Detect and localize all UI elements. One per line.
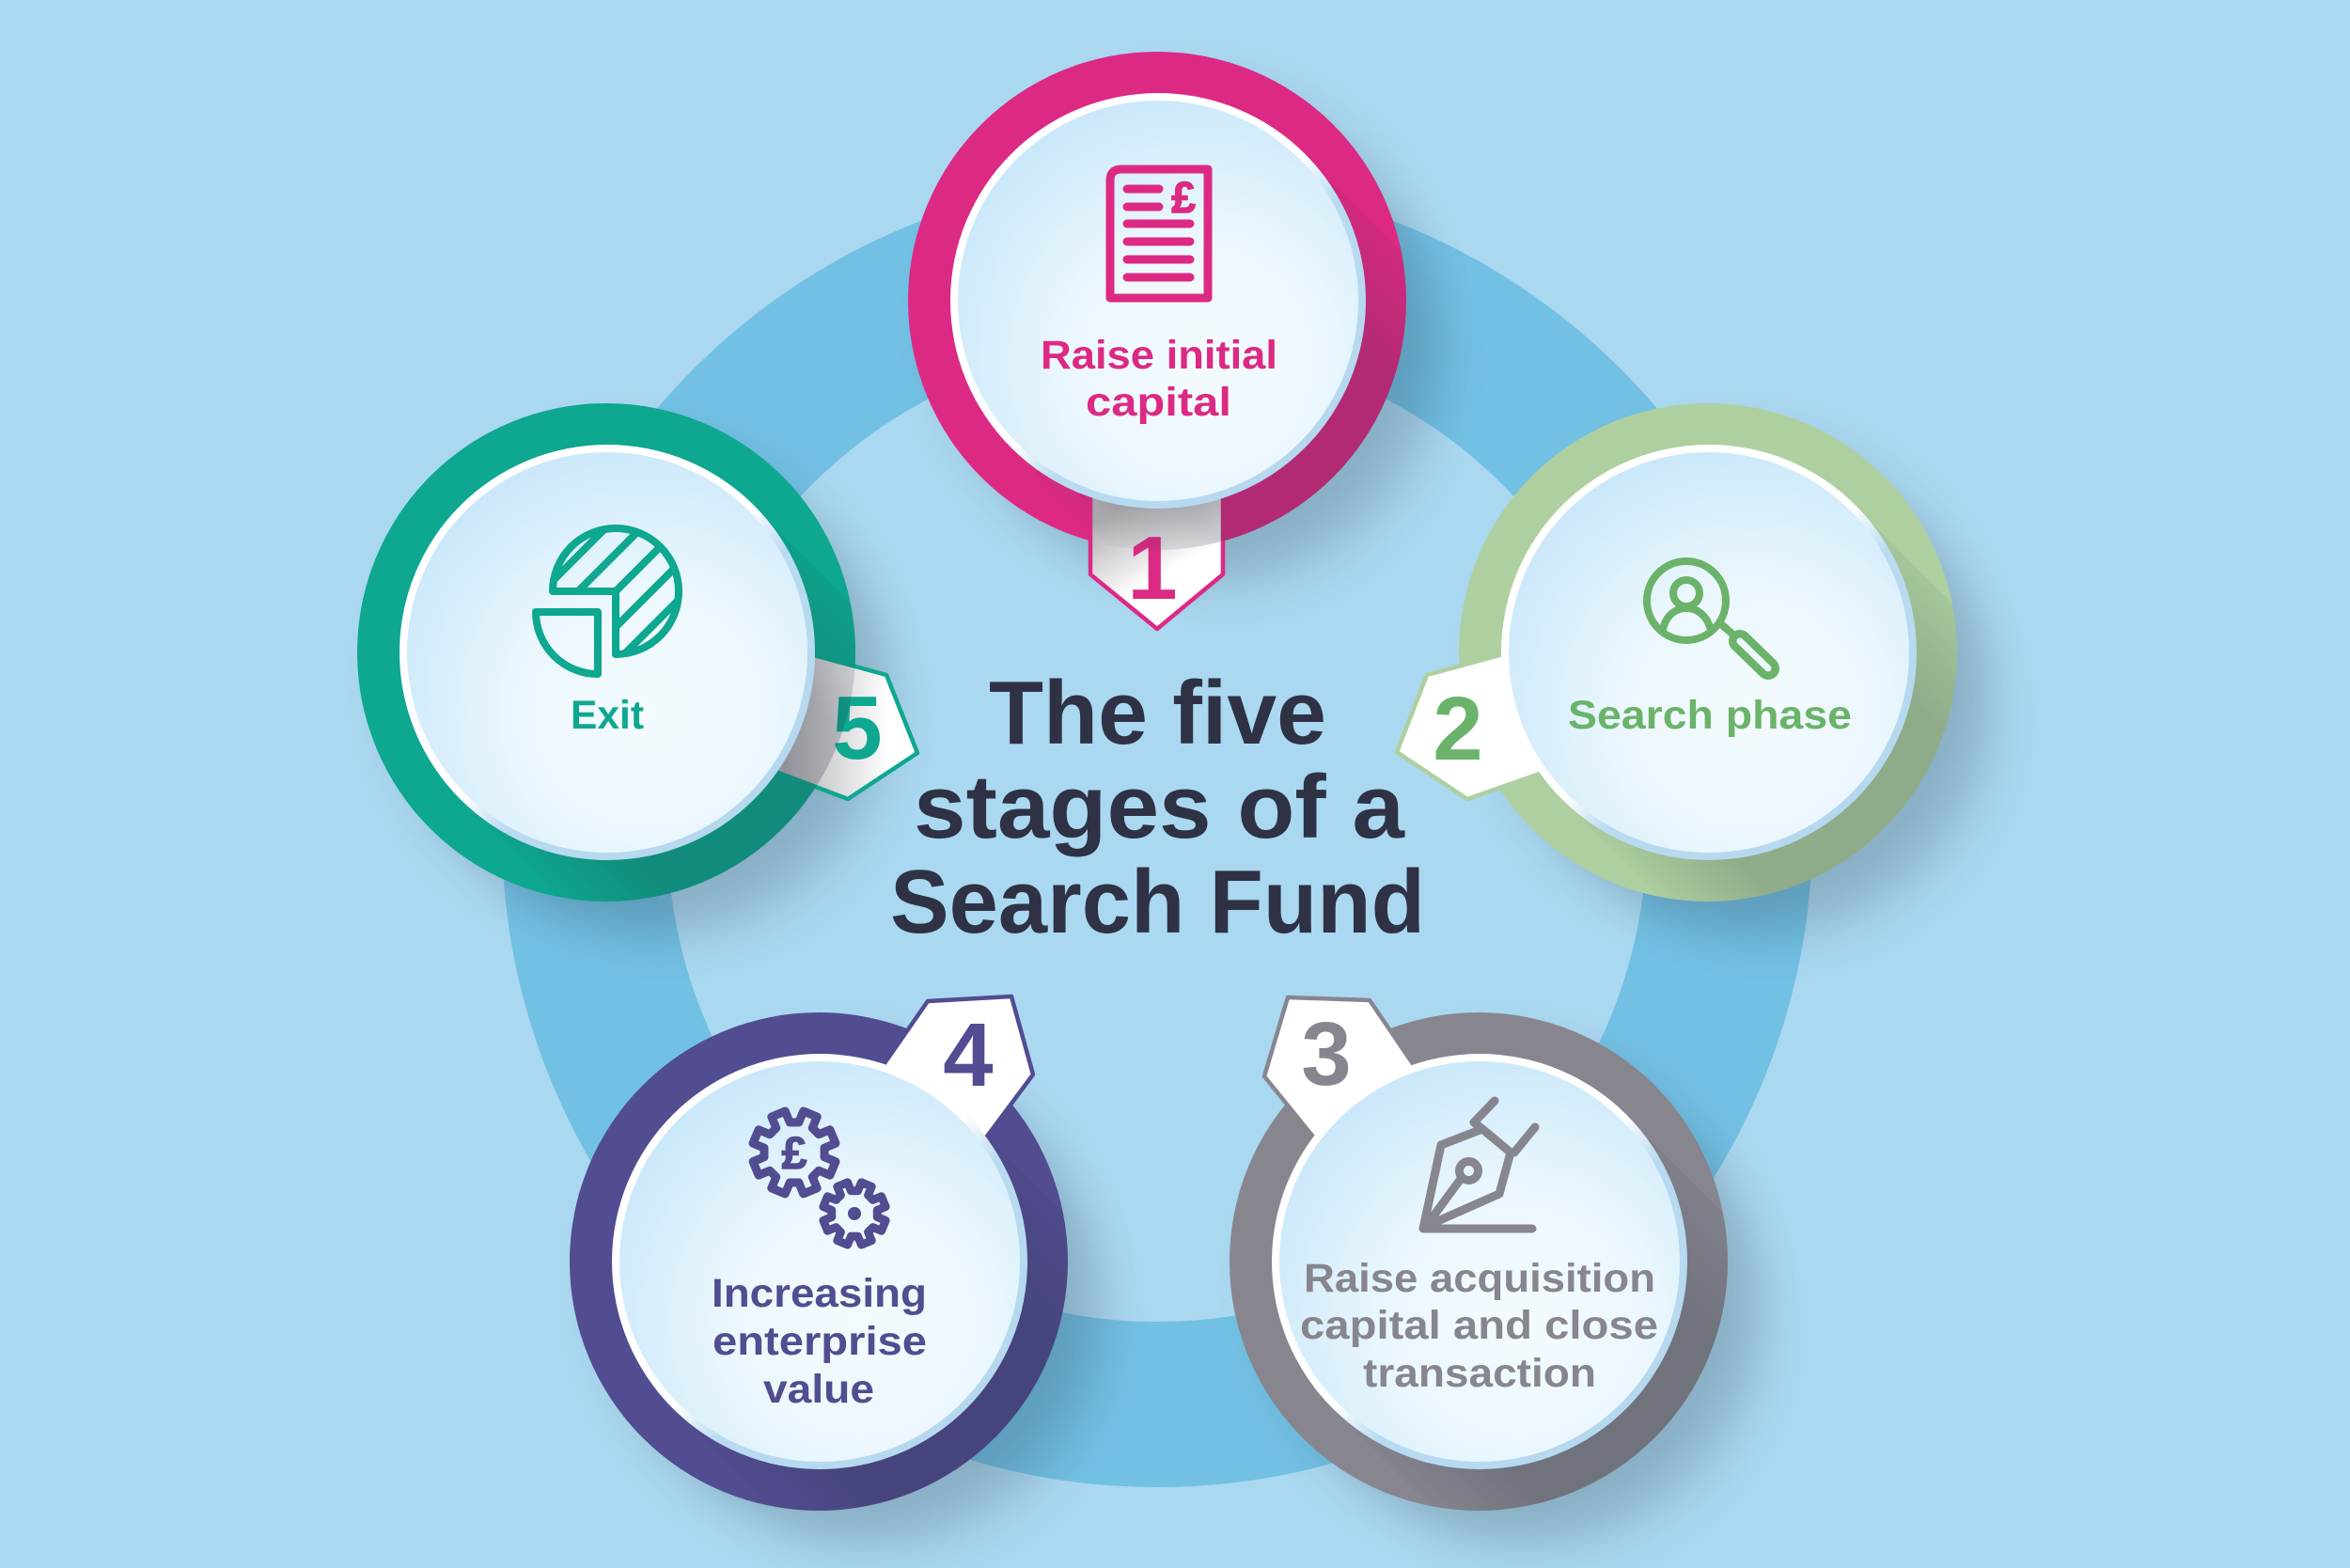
label — [712, 1271, 927, 1412]
stage 2 panel: search phase — [1397, 403, 2043, 987]
badge 5 — [724, 638, 917, 799]
label: Search phase — [1568, 693, 1852, 738]
title: The five — [989, 663, 1326, 763]
label — [1300, 1256, 1658, 1396]
label: Increasing — [712, 1271, 927, 1316]
badge 1 — [1090, 470, 1223, 629]
badge 1: 1 — [1127, 518, 1178, 619]
title — [890, 663, 1425, 952]
badge 5: 5 — [832, 678, 883, 778]
label: Exit — [571, 693, 644, 738]
label: enterprise — [713, 1319, 927, 1364]
icon: gears with pound sign — [740, 1098, 896, 1255]
badge 4: 4 — [943, 1005, 994, 1105]
icon: fountain pen nib — [1423, 1101, 1535, 1229]
badge 3: 3 — [1301, 1004, 1352, 1105]
label — [1041, 333, 1277, 425]
icon: person in magnifier — [1647, 561, 1768, 668]
label: transaction — [1363, 1351, 1596, 1396]
label: Raise initial — [1041, 333, 1277, 378]
stage 3 panel: raise acquisition capital and close transaction — [1230, 997, 1813, 1568]
badge 4 — [846, 996, 1033, 1200]
icon: gears with pound sign: £ — [782, 1129, 807, 1179]
title: stages of a — [914, 757, 1405, 857]
badge 2: 2 — [1433, 679, 1483, 779]
badge 3 — [1264, 997, 1448, 1195]
label: Raise acquisition — [1304, 1256, 1655, 1301]
badge 2 — [1397, 645, 1574, 799]
icon: invoice document — [1110, 169, 1208, 298]
title: Search Fund — [890, 852, 1425, 952]
cycle ring — [585, 259, 1730, 1404]
label: value — [763, 1367, 874, 1412]
label: capital and close — [1300, 1303, 1658, 1348]
stage 1 panel: raise initial capital — [908, 52, 1492, 635]
stage 5 panel: exit — [357, 403, 941, 987]
stage 4 panel: increasing enterprise value — [570, 996, 1153, 1568]
icon: invoice document: £ — [1171, 173, 1196, 222]
label: capital — [1086, 380, 1231, 425]
icon: pie chart — [532, 525, 682, 678]
